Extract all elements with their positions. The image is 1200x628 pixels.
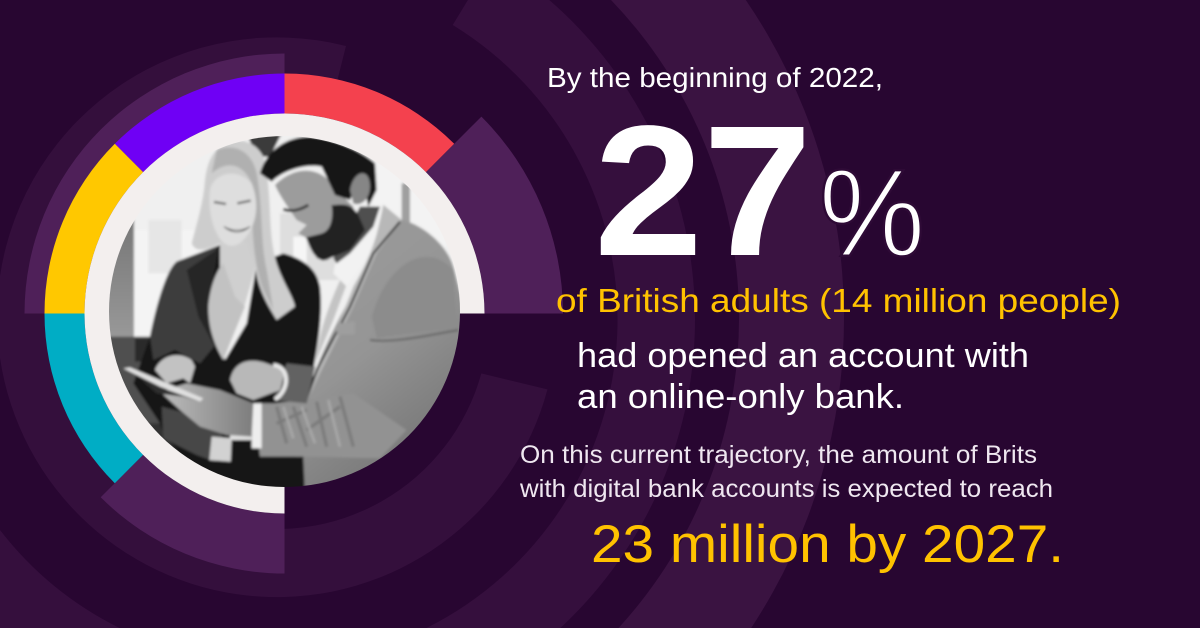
text: online-only bank statement: an online-only bank. <box>577 378 904 416</box>
photo: two colleagues using a tablet <box>109 136 460 487</box>
segment: purple upper-left backing <box>24 54 284 314</box>
text: trajectory note <box>519 441 1053 503</box>
segment: teal <box>44 314 143 483</box>
donut ring chart <box>24 54 563 574</box>
text: British adults highlight: of British adults (14 million people) <box>556 282 1121 319</box>
big number: 27: 27 <box>594 88 812 295</box>
segment: purple right wedge <box>426 117 563 313</box>
segment: yellow <box>44 144 143 314</box>
background ring: outer band <box>611 0 844 628</box>
percent sign: % <box>819 145 925 283</box>
segment: off-white ring <box>84 113 485 514</box>
background ring: inner band <box>0 37 548 597</box>
segment: red <box>284 74 454 172</box>
segment: violet <box>115 74 284 172</box>
segment: purple bottom wedge <box>101 455 284 574</box>
text: 2027 forecast: 23 million by 2027. <box>591 515 1064 574</box>
text: trajectory note: with digital bank accounts is expected to reach <box>519 475 1053 503</box>
text: trajectory note: On this current trajectory, the amount of Brits <box>520 441 1037 469</box>
text: online-only bank statement <box>577 337 1029 416</box>
text: online-only bank statement: had opened an account with <box>577 337 1029 375</box>
background ring: middle band <box>0 0 695 628</box>
text: intro line: By the beginning of 2022, <box>547 62 883 93</box>
